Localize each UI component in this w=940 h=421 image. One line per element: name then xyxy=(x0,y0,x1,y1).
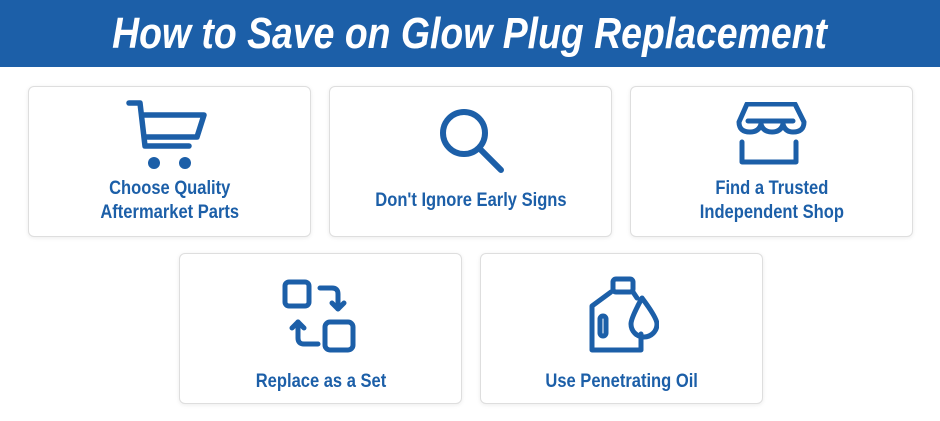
icon: magnifier xyxy=(440,109,504,173)
text xyxy=(699,178,844,223)
text: Independent Shop xyxy=(699,202,844,223)
icon: cart xyxy=(126,100,207,169)
text: Find a Trusted xyxy=(715,178,828,199)
text: Don't Ignore Early Signs xyxy=(375,190,566,211)
icon: swap xyxy=(282,280,356,352)
text: Use Penetrating Oil xyxy=(545,371,698,392)
text: Aftermarket Parts xyxy=(100,202,239,223)
text: Replace as a Set xyxy=(255,371,386,392)
header: How to Save on Glow Plug Replacement xyxy=(113,9,827,58)
header xyxy=(0,0,940,67)
text: Choose Quality xyxy=(109,178,230,199)
text xyxy=(100,178,239,223)
panel: early signs xyxy=(329,86,612,237)
icon: store xyxy=(736,102,806,164)
panel: replace as set xyxy=(179,253,462,404)
panel: trusted shop xyxy=(630,86,913,237)
panel: penetrating oil xyxy=(480,253,763,404)
icon: oil bottle xyxy=(590,276,659,352)
panel: quality parts xyxy=(28,86,311,237)
